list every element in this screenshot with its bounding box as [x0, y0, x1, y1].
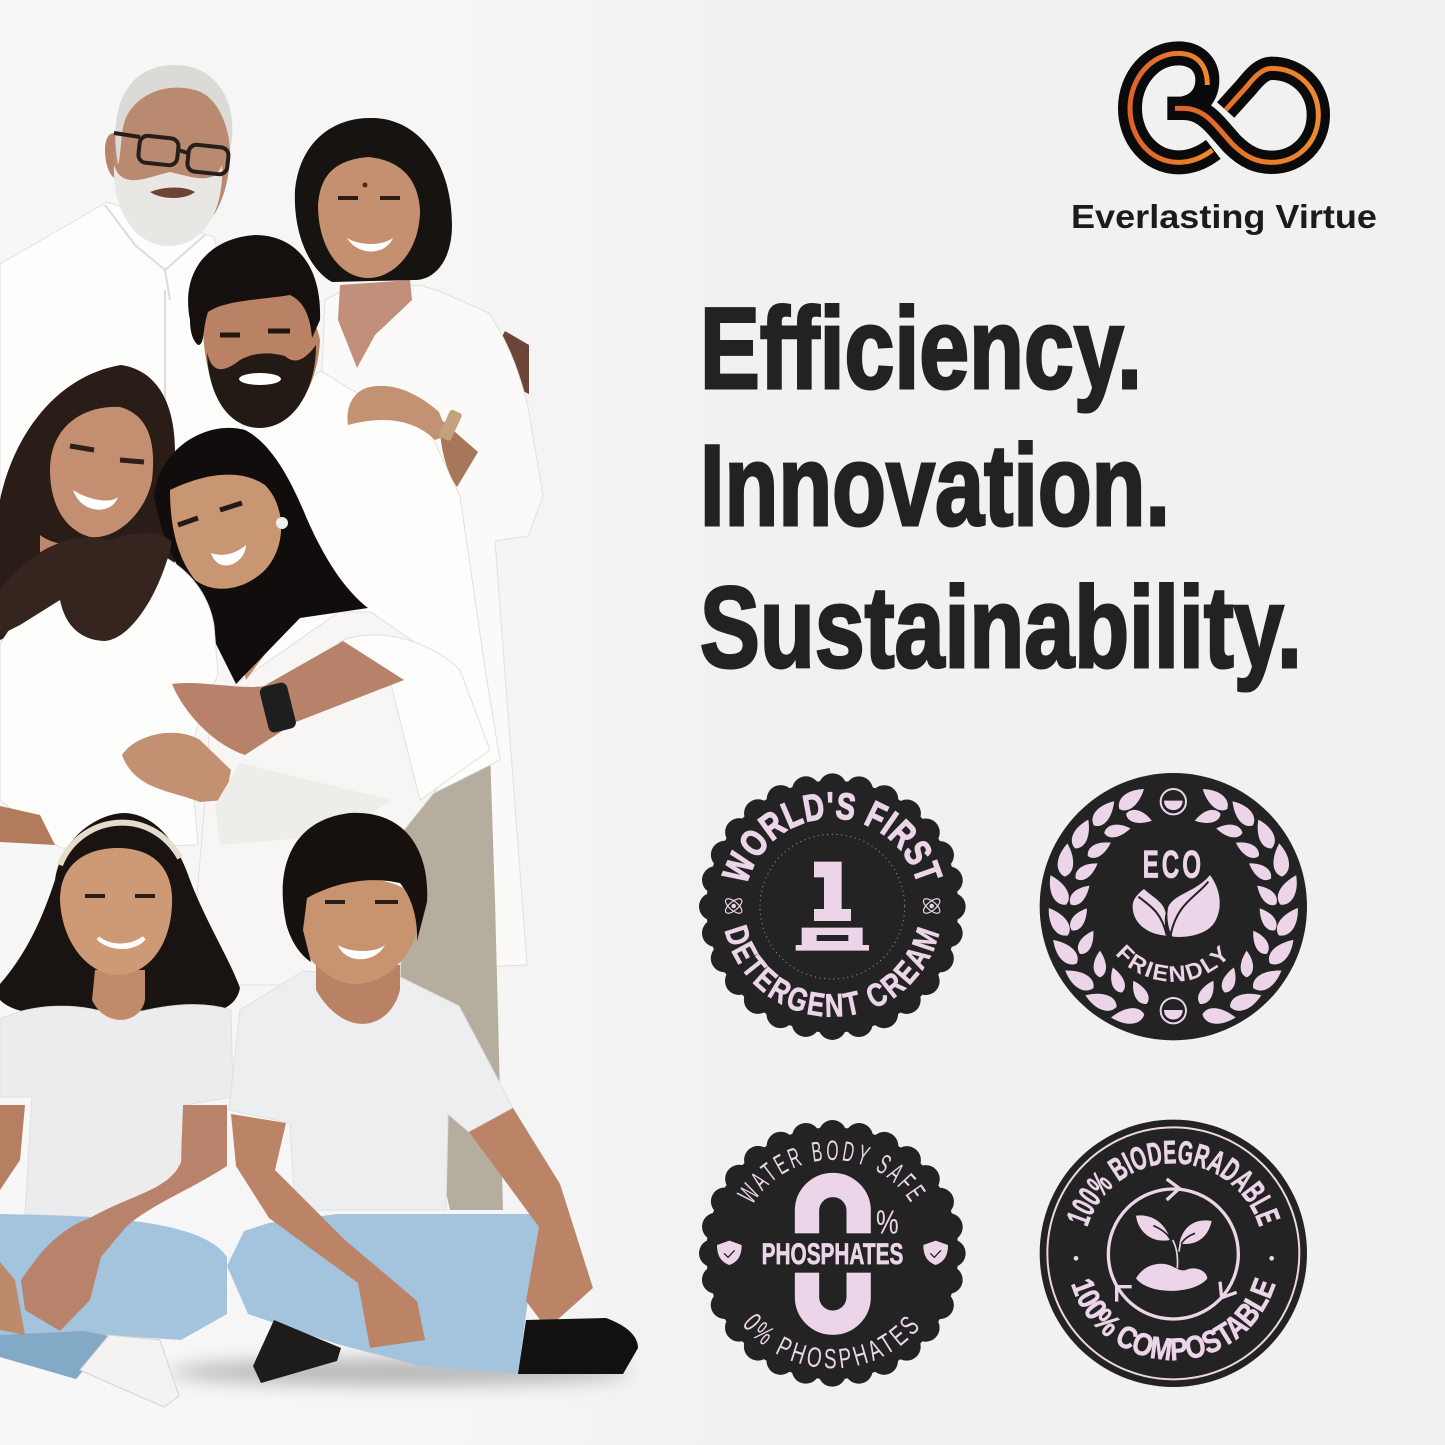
woman center	[154, 428, 460, 985]
laurel wreath	[1042, 783, 1304, 1025]
badge: biodegradable compostable: 100% COMPOSTABLE	[1071, 1277, 1276, 1361]
girl	[0, 813, 240, 1407]
icon: number one trophy	[796, 862, 869, 951]
woman sleeve	[215, 763, 391, 845]
badge: world's first detergent cream	[699, 773, 966, 1040]
badge: eco friendly: FRIENDLY	[1116, 944, 1226, 982]
small emblems	[1161, 789, 1186, 1023]
badge: zero percent phosphates: 0% PHOSPHATES	[744, 1314, 918, 1368]
badge: world's first detergent cream: WORLD'S FIRST	[721, 792, 944, 882]
boy	[227, 813, 638, 1383]
father	[188, 235, 500, 800]
trousers	[400, 750, 503, 1210]
badge: biodegradable compostable: 100% BIODEGRADABLE	[1067, 1140, 1281, 1227]
icon: atoms	[723, 896, 942, 916]
father arm and watch	[122, 635, 490, 802]
grandfather	[0, 65, 262, 600]
icon: two leaves	[1133, 875, 1220, 937]
grandmother	[295, 118, 543, 967]
badge: zero percent phosphates	[699, 1120, 966, 1387]
badge: eco friendly	[1040, 773, 1307, 1040]
badge: zero percent phosphates: PHOSPHATES	[762, 1238, 903, 1271]
badge: zero percent phosphates: WATER BODY SAFE	[736, 1140, 926, 1202]
icon: sprout	[1136, 1215, 1212, 1291]
badge: eco friendly: ECO	[1143, 843, 1204, 886]
icon: recycling circle	[1108, 1179, 1238, 1319]
logo mark	[1130, 53, 1318, 162]
headline: Innovation.	[700, 422, 1170, 550]
badge: biodegradable compostable	[1040, 1120, 1307, 1387]
badge: zero percent phosphates: %	[876, 1204, 899, 1241]
badge: world's first detergent cream: DETERGENT CREAM	[724, 924, 940, 1018]
woman left hair	[0, 365, 180, 641]
headline: Efficiency.	[700, 285, 1142, 413]
logo wordmark: Everlasting Virtue	[1071, 198, 1377, 235]
icon: shields	[717, 1241, 948, 1265]
headline	[700, 285, 1302, 692]
woman left body	[0, 407, 218, 848]
family photo illustration	[0, 65, 638, 1407]
